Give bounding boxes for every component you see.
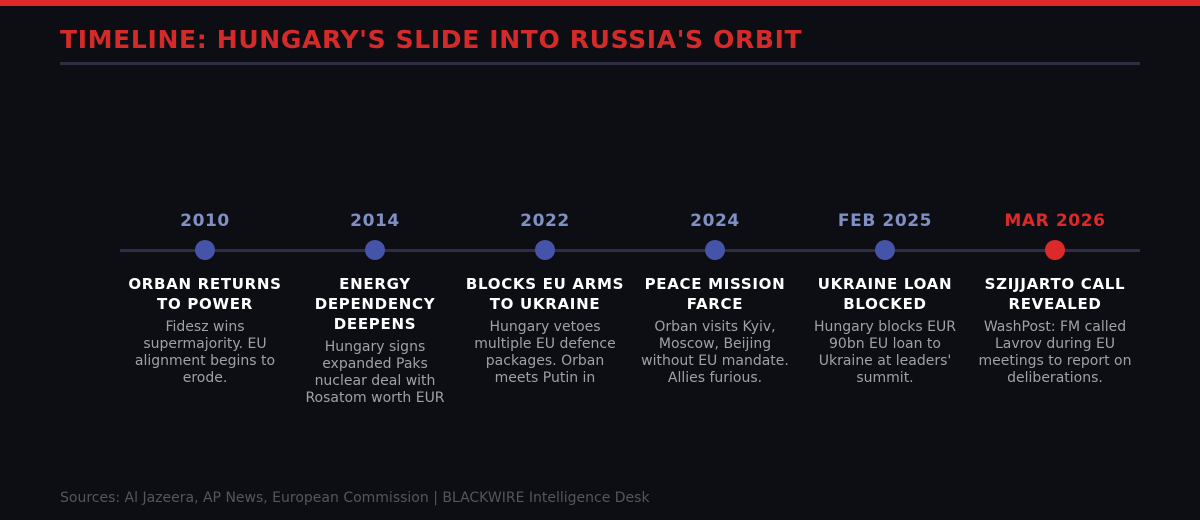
event mar 2026: MAR 2026 [1004,211,1106,231]
sources footer: Sources: Al Jazeera, AP News, European Commission | BLACKWIRE Intelligence Desk [60,490,650,506]
event mar 2026: WashPost: FM called Lavrov during EU meetings to report on deliberations. [979,319,1131,386]
event 2010 [128,211,282,386]
event feb 2025: Hungary blocks EUR 90bn EU loan to Ukraine at leaders' summit. [814,319,956,386]
event 2024: 2024 [690,211,740,231]
timeline axis [120,249,1140,252]
event 2014: 2014 [350,211,400,231]
event 2010: 2010 [180,211,230,231]
event 2024: PEACE MISSION FARCE [645,275,785,313]
event 2022 [466,211,624,386]
event feb 2025: FEB 2025 [838,211,932,231]
event mar 2026: SZIJJARTO CALL REVEALED [985,275,1125,313]
event 2014: ENERGY DEPENDENCY DEEPENS [315,275,435,333]
event mar 2026 [979,211,1131,386]
top red bar [0,0,1200,6]
event 2014 [305,211,445,406]
event 2010: ORBAN RETURNS TO POWER [128,275,282,313]
event 2024: Orban visits Kyiv, Moscow, Beijing without EU mandate. Allies furious. [641,319,789,386]
event 2022: BLOCKS EU ARMS TO UKRAINE [466,275,624,313]
event 2010: Fidesz wins supermajority. EU alignment begins to erode. [135,319,275,386]
event 2022: 2022 [520,211,570,231]
event feb 2025: UKRAINE LOAN BLOCKED [818,275,952,313]
event feb 2025 [814,211,956,386]
event 2024 [641,211,789,386]
title: TIMELINE: HUNGARY'S SLIDE INTO RUSSIA'S ORBIT [60,25,802,54]
